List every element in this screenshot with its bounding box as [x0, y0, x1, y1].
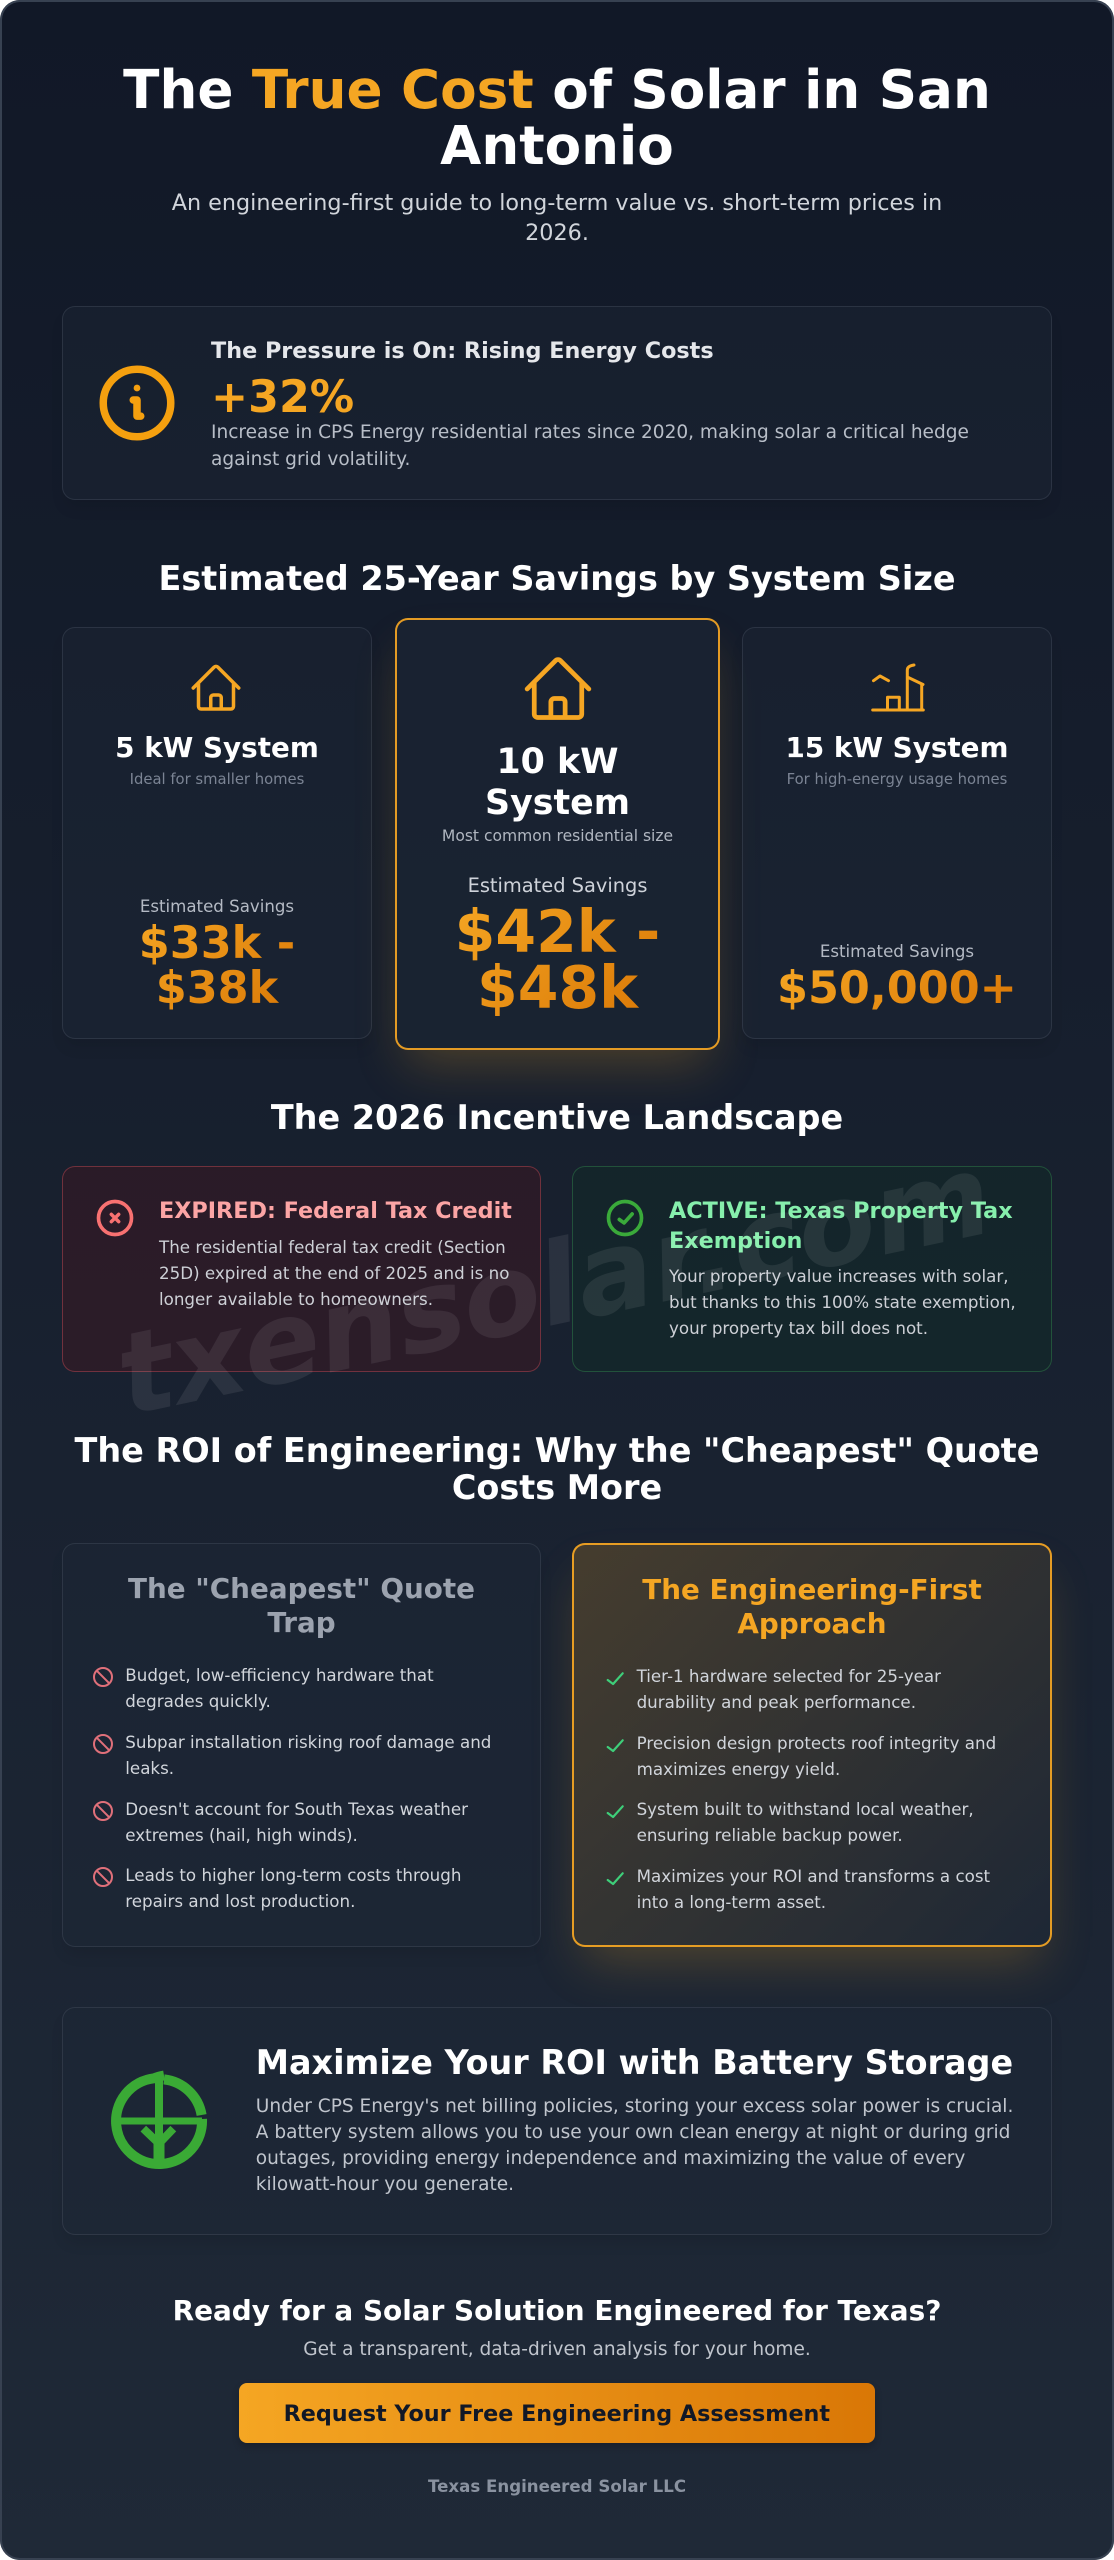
- heading: ROI of engineering: Costs More: [452, 1468, 662, 1506]
- text: active description: but thanks to this 100% state exemption,: [669, 1292, 1016, 1312]
- title: The True Cost of Solar in San: [123, 58, 991, 120]
- heading: engineering-first: The Engineering-First: [642, 1573, 982, 1606]
- panel: cheapest quote trap: [62, 1543, 541, 1947]
- heading: engineering-first: Approach: [737, 1607, 887, 1640]
- list item: subpar installation: [93, 1732, 491, 1778]
- list item: maximizes ROI: [606, 1866, 990, 1912]
- text: battery description: A battery system allows you to use your own clean energy at night or during grid: [256, 2122, 1010, 2143]
- icon: check: [606, 1672, 624, 1686]
- text: call to action subtitle: Get a transparent, data-driven analysis for your home.: [303, 2338, 811, 2360]
- heading: pressure: The Pressure is On: Rising Energy Costs: [211, 338, 714, 364]
- text: weather: [125, 1799, 468, 1845]
- text: rate description: against grid volatility.: [211, 448, 410, 470]
- subtitle: An engineering-first guide to long-term value vs. short-term prices in: [172, 190, 942, 216]
- heading: battery: Maximize Your ROI with Battery Storage: [256, 2043, 1013, 2082]
- panel: active Texas exemption: [572, 1166, 1052, 1372]
- text: maximizes ROI: [637, 1866, 990, 1912]
- heading: cheapest trap: Trap: [267, 1606, 336, 1639]
- text: battery description: outages, providing energy independence and maximizing the value of every: [256, 2148, 965, 2169]
- icon: broken building glyph: [871, 664, 925, 712]
- list item: weather: [93, 1799, 468, 1845]
- text: subpar installation: Subpar installation risking roof damage and: [125, 1732, 491, 1752]
- text: system built: ensuring reliable backup power.: [637, 1825, 903, 1845]
- label: estimated savings: Estimated Savings: [140, 897, 294, 916]
- text: tier-1 hardware: [636, 1666, 941, 1712]
- text: expired description: 25D) expired at the end of 2025 and is no: [159, 1263, 509, 1283]
- heading: savings by system size: Estimated 25-Year Savings by System Size: [158, 558, 956, 598]
- heading: active: Exemption: [669, 1228, 802, 1254]
- button: request assessment: Request Your Free Engineering Assessment: [284, 2401, 830, 2427]
- value: 50,000 plus: $50,000+: [777, 962, 1017, 1014]
- heading: cheapest trap: The "Cheapest" Quote: [128, 1572, 475, 1605]
- list item: tier-1 hardware: [606, 1666, 941, 1712]
- text: battery description: [256, 2094, 1013, 2198]
- icon: check circle: [606, 1200, 644, 1236]
- text: rate description: Increase in CPS Energy residential rates since 2020, making solar a critical hedge: [211, 422, 969, 443]
- value: 33k to 38k: $38k: [156, 962, 278, 1014]
- text: active description: [669, 1266, 1016, 1338]
- label: 15 kW system: 15 kW System: [786, 731, 1008, 764]
- label: estimated savings: Estimated Savings: [820, 942, 974, 960]
- text: weather: extremes (hail, high winds).: [125, 1825, 358, 1845]
- text: long-term costs: repairs and lost production.: [125, 1891, 355, 1911]
- icon: small house: [191, 664, 241, 711]
- icon: check: [606, 1872, 624, 1886]
- value: 42k to 48k: $42k -: [455, 898, 660, 966]
- heading: ROI of engineering: [74, 1430, 1039, 1506]
- panel: 5 kW system: [62, 627, 372, 1039]
- text: most common: Most common residential size: [442, 827, 673, 845]
- heading: expired: EXPIRED: Federal Tax Credit: [159, 1198, 512, 1224]
- subtitle: [172, 190, 942, 246]
- icon: check: [606, 1805, 624, 1818]
- text: battery description: Under CPS Energy's net billing policies, storing your excess solar power is crucial.: [256, 2096, 1013, 2117]
- label: 10 kW system: 10 kW: [496, 742, 619, 782]
- heading: ROI of engineering: The ROI of Engineering: Why the "Cheapest" Quote: [75, 1430, 1039, 1470]
- label: 10 kW system: System: [485, 783, 630, 823]
- icon: prohibited: [93, 1801, 113, 1821]
- panel: 15 kW system: [742, 627, 1052, 1039]
- text: rate description: [211, 422, 969, 470]
- heading: incentive landscape: The 2026 Incentive Landscape: [271, 1098, 843, 1136]
- value: 33k to 38k: [127, 920, 307, 1010]
- title: [123, 58, 991, 176]
- icon: check: [606, 1739, 624, 1752]
- panel: engineering-first approach: [572, 1543, 1052, 1947]
- icon: prohibited: [93, 1734, 113, 1754]
- subtitle: 2026.: [525, 220, 589, 246]
- heading: active: ACTIVE: Texas Property Tax: [669, 1198, 1013, 1224]
- text: ideal for: Ideal for smaller homes: [130, 771, 304, 788]
- heading: cheapest trap: [128, 1572, 475, 1639]
- heading: engineering-first: [642, 1573, 982, 1640]
- icon: info circle: [100, 366, 174, 440]
- list item: long-term costs: [93, 1865, 461, 1911]
- icon: battery glyph: [104, 2066, 214, 2176]
- text: system built: [637, 1799, 974, 1845]
- title: Antonio: [440, 114, 674, 176]
- list item: system built: [606, 1799, 974, 1845]
- text: subpar installation: leaks.: [125, 1758, 174, 1778]
- text: system built: System built to withstand local weather,: [637, 1799, 974, 1819]
- text: weather: Doesn't account for South Texas weather: [125, 1799, 468, 1819]
- heading: call to action: Ready for a Solar Solution Engineered for Texas?: [173, 2294, 941, 2326]
- text: budget hardware: [125, 1665, 434, 1711]
- text: active description: your property tax bill does not.: [669, 1318, 928, 1338]
- text: budget hardware: Budget, low-efficiency hardware that: [125, 1665, 434, 1685]
- panel: battery storage: [62, 2007, 1052, 2234]
- list item: budget hardware: [93, 1665, 434, 1711]
- watermark: txensolar.com: [106, 1128, 1002, 1442]
- icon: x circle: [96, 1200, 134, 1236]
- panel: expired federal credit: [62, 1166, 541, 1372]
- label: estimated savings: Estimated Savings: [468, 874, 647, 897]
- text: subpar installation: [125, 1732, 491, 1778]
- text: long-term costs: Leads to higher long-term costs through: [125, 1865, 461, 1885]
- value: 42k to 48k: [447, 904, 668, 1016]
- icon: large house: [524, 657, 592, 720]
- text: expired description: [158, 1237, 509, 1309]
- icon: prohibited: [93, 1867, 113, 1887]
- text: tier-1 hardware: durability and peak performance.: [637, 1692, 916, 1712]
- text: budget hardware: degrades quickly.: [125, 1691, 271, 1711]
- text: battery description: kilowatt-hour you generate.: [256, 2174, 514, 2195]
- label: 10 kW system: [485, 742, 630, 823]
- text: maximizes ROI: into a long-term asset.: [637, 1892, 826, 1912]
- stat: plus 32 percent: +32%: [211, 372, 354, 423]
- text: precision design: Precision design protects roof integrity and: [637, 1732, 996, 1752]
- text: long-term costs: [125, 1865, 461, 1911]
- text: for high energy: For high-energy usage homes: [787, 771, 1007, 788]
- icon: prohibited: [93, 1667, 113, 1687]
- text: precision design: maximizes energy yield.: [637, 1758, 840, 1778]
- text: expired description: The residential federal tax credit (Section: [159, 1237, 506, 1257]
- button: request assessment: [239, 2383, 875, 2443]
- footer: Texas Engineered Solar LLC: [428, 2476, 686, 2496]
- text: tier-1 hardware: Tier-1 hardware selected for 25-year: [637, 1666, 941, 1686]
- text: precision design: [637, 1732, 996, 1778]
- text: maximizes ROI: Maximizes your ROI and transforms a cost: [637, 1866, 990, 1886]
- label: 5 kW system: 5 kW System: [115, 731, 319, 764]
- text: active description: Your property value increases with solar,: [669, 1266, 1009, 1286]
- value: 42k to 48k: $48k: [477, 954, 638, 1022]
- panel: rising energy costs: [62, 306, 1052, 500]
- panel: 10 kW system: [395, 618, 720, 1050]
- text: expired description: longer available to homeowners.: [159, 1289, 433, 1309]
- heading: active: [669, 1198, 1013, 1254]
- value: 33k to 38k: $33k -: [139, 918, 295, 968]
- list item: precision design: [606, 1732, 996, 1778]
